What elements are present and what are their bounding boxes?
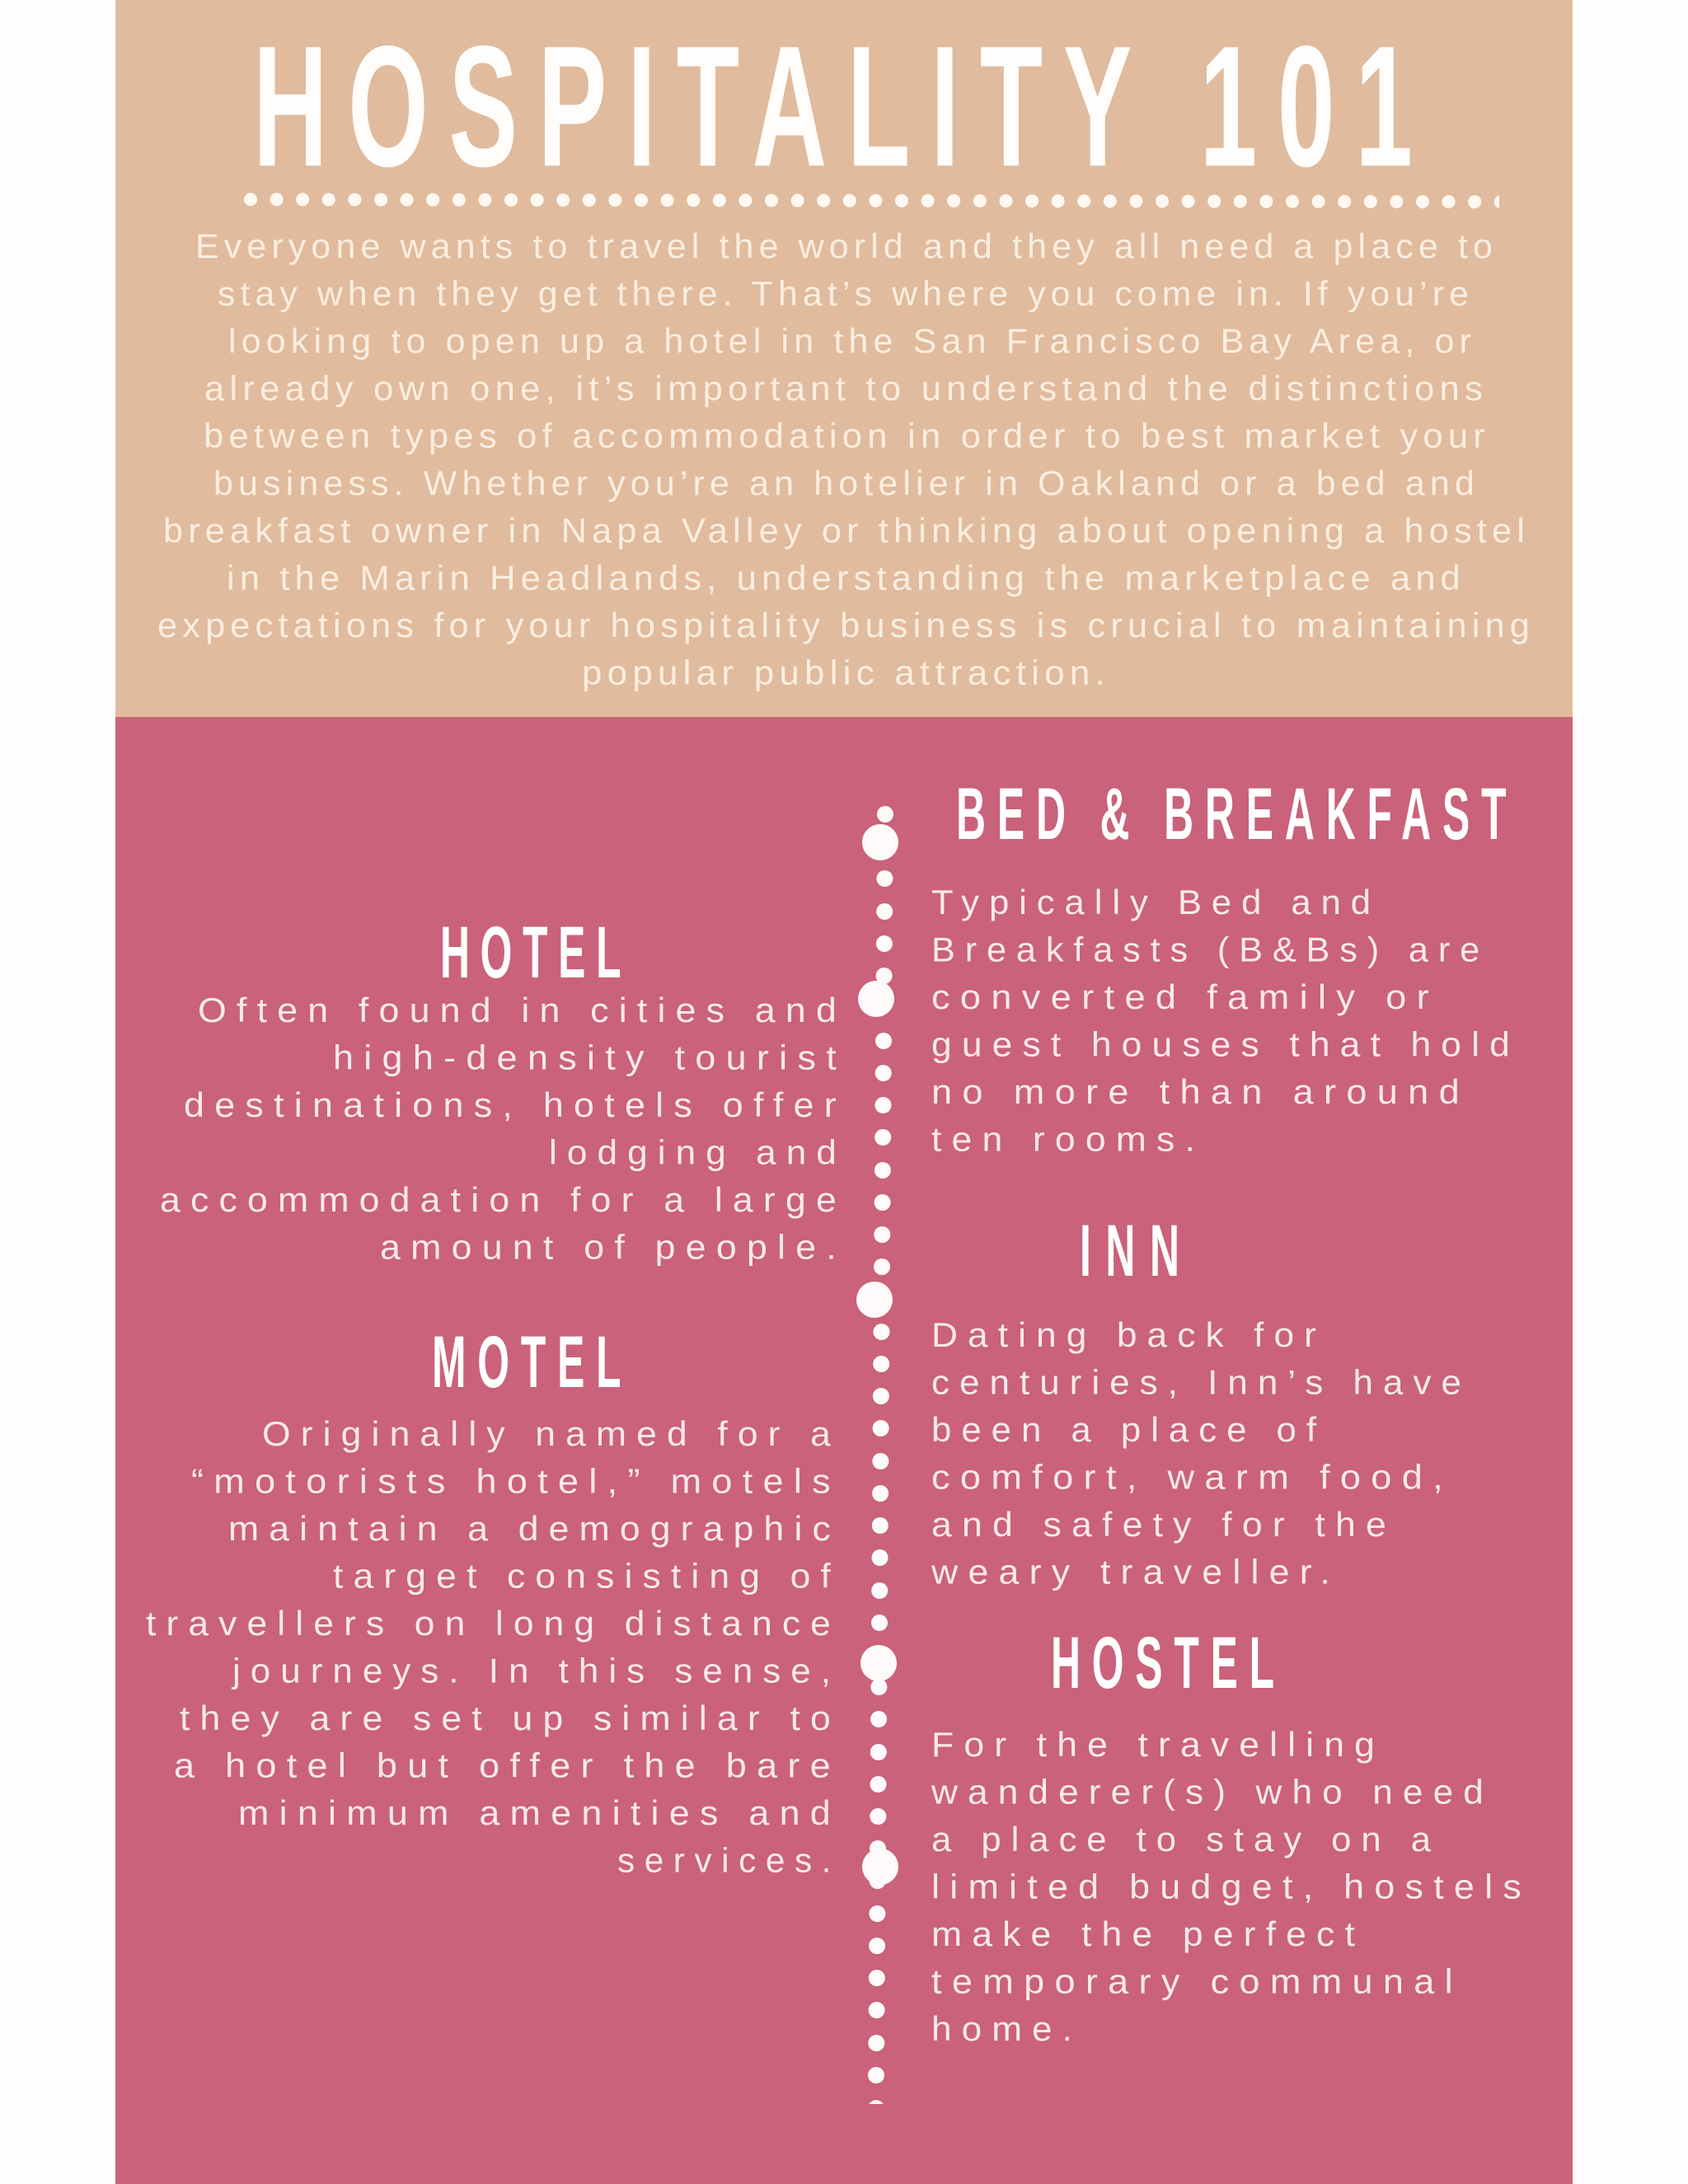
text: inn description: comfort, warm food, [931,1457,1453,1497]
intro text block: Everyone wants to travel the world and they all need a place to [195,227,1498,265]
intro text block: looking to open up a hotel in the San Francisco Bay Area, or [228,321,1476,360]
text: hostel description [931,1725,1531,2048]
text: hotel description [160,991,846,1266]
text: motel description: target consisting of [333,1556,841,1596]
text: motel description [146,1414,841,1879]
intro text block: stay when they get there. That’s where you come in. If you’re [218,274,1474,313]
text: motel description: maintain a demographic [228,1509,841,1548]
heading: motel: MOTEL [432,1322,621,1404]
text: hostel description: make the perfect [931,1915,1365,1953]
text: inn description: and safety for the [931,1505,1396,1544]
text: inn description: been a place of [931,1410,1326,1449]
intro text block [157,227,1535,692]
text: hotel description: lodging and [549,1132,846,1172]
text: inn description: Dating back for [931,1315,1326,1354]
dotted divider [244,193,1499,209]
panel: types background [115,717,1573,2184]
panel: intro background [115,0,1573,717]
text: hotel description: amount of people. [380,1228,846,1266]
text: hotel description: destinations, hotels offer [184,1085,846,1124]
intro text block: breakfast owner in Napa Valley or thinking about opening a hostel [163,511,1530,550]
text: hostel description: limited budget, hostels [931,1868,1531,1905]
section: hostel [931,1623,1531,2048]
intro text block: popular public attraction. [582,653,1110,692]
section: inn [931,1211,1471,1591]
text: bed and breakfast description: Typically Bed and [931,883,1381,921]
text: hostel description: For the travelling [931,1725,1385,1764]
text: motel description: minimum amenities and [238,1793,841,1832]
text: inn description: centuries, Inn’s have [931,1363,1471,1401]
section: hotel [160,912,846,1266]
text: motel description: services. [617,1841,841,1879]
text: inn description [931,1315,1471,1591]
text: hostel description: a place to stay on a [931,1820,1441,1858]
text: motel description: they are set up similar to [180,1699,841,1737]
heading: hotel: HOTEL [440,912,621,994]
heading: inn: INN [1080,1211,1179,1292]
text: bed and breakfast description: no more than around [931,1072,1470,1111]
text: hostel description: temporary communal [931,1961,1463,2001]
text: motel description: “motorists hotel,” motels [191,1462,841,1500]
text: hotel description: high-density tourist [333,1038,846,1076]
section: motel [146,1322,841,1879]
intro text block: business. Whether you’re an hotelier in Oakland or a bed and [213,463,1479,503]
title: HOSPITALITY 101 [253,10,1413,203]
text: bed and breakfast description: converted family or [931,977,1439,1016]
heading: hostel: HOSTEL [1051,1623,1274,1704]
text: motel description: a hotel but offer the bare [174,1746,841,1785]
text: bed and breakfast description: Breakfasts (B&Bs) are [931,930,1489,969]
text: motel description: Originally named for a [262,1414,841,1453]
text: motel description: travellers on long distance [146,1604,841,1643]
text: inn description: weary traveller. [931,1553,1340,1591]
text: bed and breakfast description [931,883,1520,1159]
intro text block: between types of accommodation in order to best market your [204,416,1490,455]
text: hotel description: Often found in cities and [198,991,846,1029]
heading: bed and breakfast: BED & BREAKFAST [956,774,1507,855]
text: bed and breakfast description: ten rooms. [931,1119,1205,1159]
dotted vertical timeline [856,806,898,2104]
intro text block: already own one, it’s important to understand the distinctions [204,369,1488,407]
text: hotel description: accommodation for a large [160,1180,846,1219]
section: bed and breakfast [931,774,1520,1159]
intro text block: expectations for your hospitality business is crucial to maintaining [157,606,1535,644]
text: hostel description: home. [931,2009,1082,2048]
text: motel description: journeys. In this sense, [231,1652,841,1690]
intro text block: in the Marin Headlands, understanding the marketplace and [227,559,1465,597]
text: hostel description: wanderer(s) who need [931,1772,1493,1811]
text: bed and breakfast description: guest houses that hold [931,1025,1520,1063]
